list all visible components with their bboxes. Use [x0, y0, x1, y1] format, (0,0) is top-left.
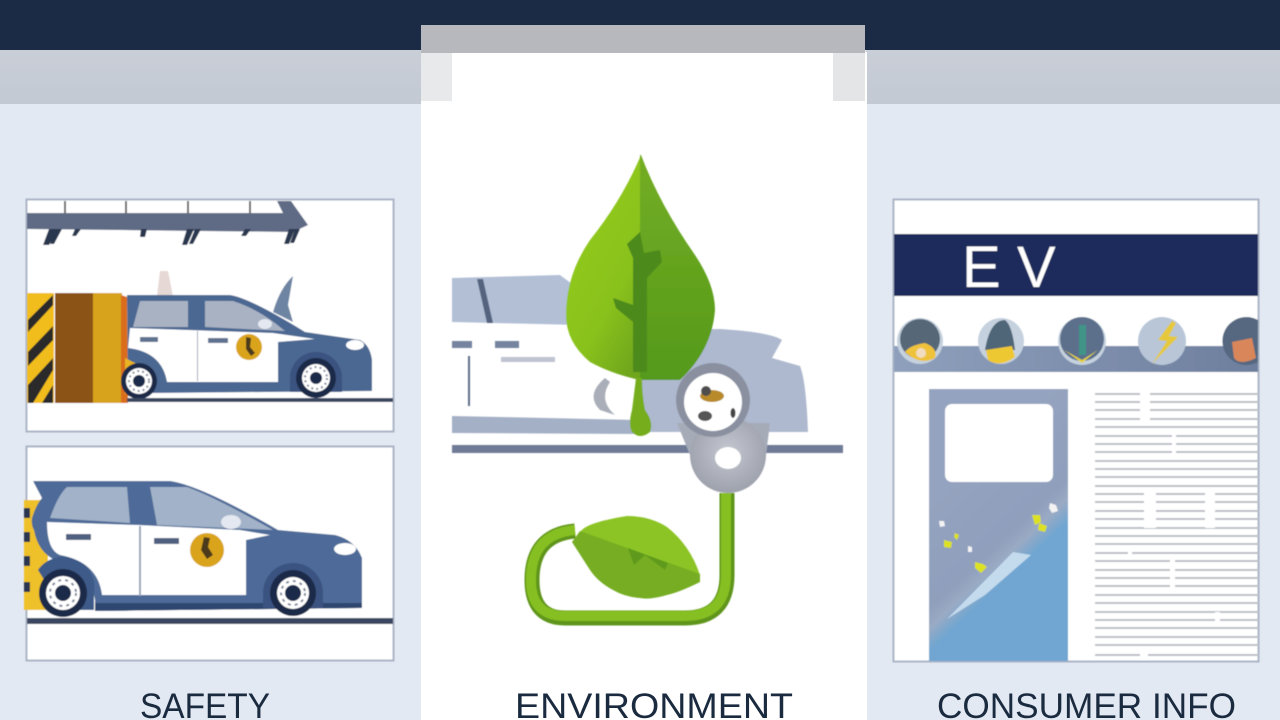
rear wheel arch: [38, 557, 94, 610]
barrier: gold block: [93, 293, 122, 403]
barrier: brown block: [55, 293, 93, 403]
ground line: [27, 618, 393, 624]
text line gaps: [1128, 390, 1220, 658]
ground line: [127, 398, 393, 402]
panel: safety crash test bottom: [24, 446, 394, 660]
yellow barrier: [24, 500, 48, 610]
frame: [894, 200, 1258, 662]
center tab: [421, 25, 865, 53]
panel: environment illustration: [452, 155, 843, 618]
icon: fruit: [1222, 317, 1258, 365]
side band: right: [866, 50, 1280, 104]
icon: food 2: [978, 318, 1024, 364]
large leaf: [566, 155, 715, 436]
white doors: [47, 522, 270, 595]
door seam: [139, 526, 141, 596]
door illustration: [929, 389, 1068, 661]
grey car: [452, 275, 808, 434]
barrier: stripes: [27, 293, 54, 403]
plug head: [677, 417, 770, 493]
banner text: V: [1017, 235, 1056, 300]
frame: [26, 446, 394, 660]
side mirror: [258, 319, 272, 329]
door seam: [197, 331, 198, 381]
guardrail arrow: [27, 201, 308, 245]
windows: [50, 487, 273, 530]
banner text: E: [962, 235, 1001, 300]
front wheel: [296, 358, 336, 398]
icon strip: [894, 346, 1258, 372]
panel background: safety column: [0, 50, 421, 720]
headlight: [334, 543, 356, 555]
text lines: [1095, 393, 1259, 656]
small leaf: [572, 516, 700, 599]
door handles: [66, 534, 179, 544]
rear wheel: [39, 569, 87, 617]
rear wheel: [121, 363, 157, 399]
panel background: environment column: [421, 52, 867, 720]
icon: plant: [1058, 317, 1106, 365]
side mirror: [221, 515, 241, 529]
barrier: orange edge: [121, 295, 128, 403]
cable: [531, 493, 727, 618]
charging socket: [676, 363, 750, 437]
car body: [127, 295, 372, 396]
side band: left: [0, 50, 421, 104]
white doors: [128, 328, 315, 382]
front wheel arch: [290, 352, 342, 392]
lower sill: [95, 603, 362, 611]
raised hood: [273, 276, 293, 322]
frame: [26, 200, 394, 432]
front wheel: [270, 570, 316, 616]
car body: [32, 481, 362, 611]
tab corner: right: [833, 53, 865, 101]
icon: lightning: [1138, 317, 1186, 365]
panel background: consumer info column: [867, 50, 1280, 720]
barrier stripes: [24, 508, 30, 592]
panel: consumer info sheet: [894, 200, 1259, 662]
tab corner: left: [421, 53, 452, 101]
dummy figure: [157, 271, 173, 296]
panel: safety crash test top: [26, 200, 394, 432]
yellow badge: [236, 334, 262, 360]
navy banner: [894, 234, 1258, 296]
yellow badge: [190, 533, 224, 567]
headlight: [346, 340, 364, 350]
ground bar: [452, 445, 843, 453]
door handles: [140, 337, 228, 343]
header bar: [0, 0, 1280, 50]
icon: food 1: [897, 318, 943, 364]
front wheel arch: [263, 563, 323, 608]
windows: [133, 301, 285, 331]
yellow crumple zone: [125, 358, 141, 395]
